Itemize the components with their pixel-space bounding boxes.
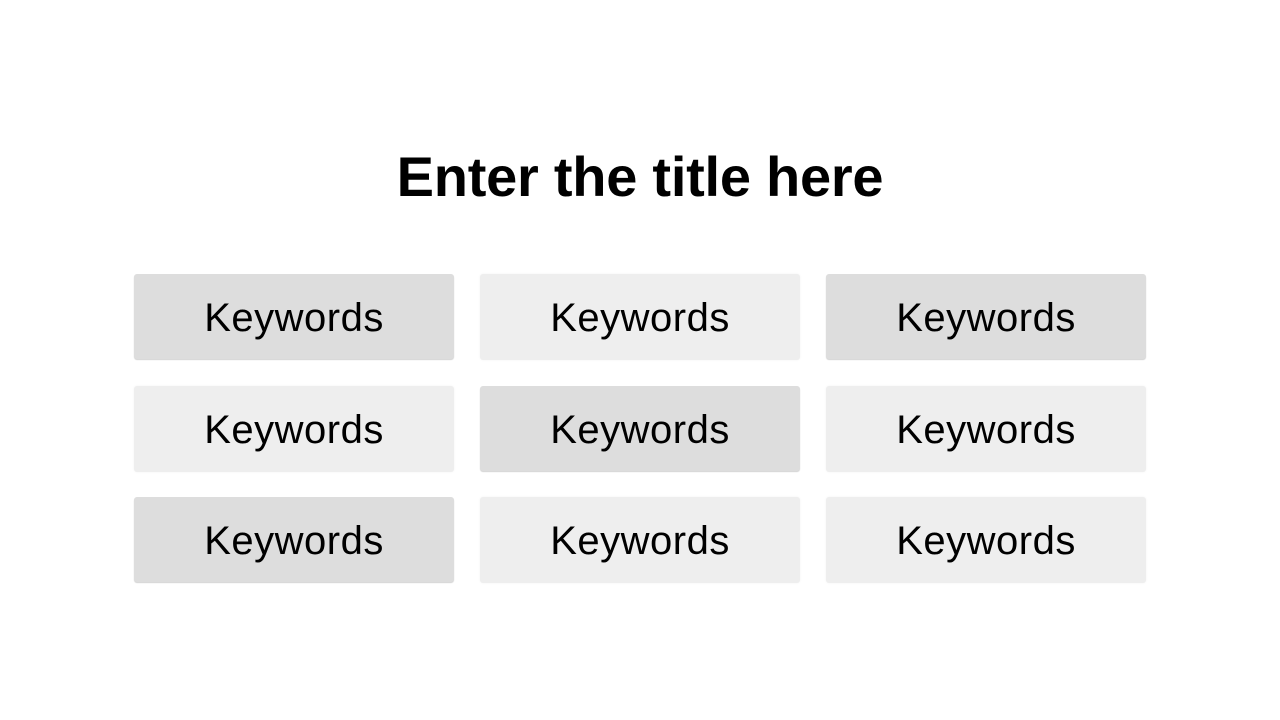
keyword box row 1 column 1: Keywords: [204, 296, 384, 340]
keyword box row 2 column 3: Keywords: [896, 408, 1076, 452]
title: Enter the title here: [397, 145, 883, 208]
keyword box row 2 column 2: [480, 386, 800, 471]
keyword box row 3 column 2: Keywords: [550, 519, 730, 563]
keyword box row 3 column 3: Keywords: [896, 519, 1076, 563]
keyword box row 2 column 1: [134, 386, 454, 472]
keyword box row 2 column 1: Keywords: [204, 408, 384, 452]
keyword box row 3 column 3: [826, 497, 1146, 583]
keyword box row 2 column 3: [826, 386, 1146, 472]
keyword box row 3 column 1: [134, 497, 454, 582]
keyword box row 1 column 1: [134, 274, 454, 359]
keyword box row 1 column 3: Keywords: [896, 296, 1076, 340]
keyword box row 2 column 2: Keywords: [550, 408, 730, 452]
keyword box row 3 column 2: [480, 497, 800, 583]
keyword box row 1 column 2: Keywords: [550, 296, 730, 340]
keyword box row 1 column 2: [480, 274, 800, 360]
keyword box row 3 column 1: Keywords: [204, 519, 384, 563]
keyword box row 1 column 3: [826, 274, 1146, 359]
